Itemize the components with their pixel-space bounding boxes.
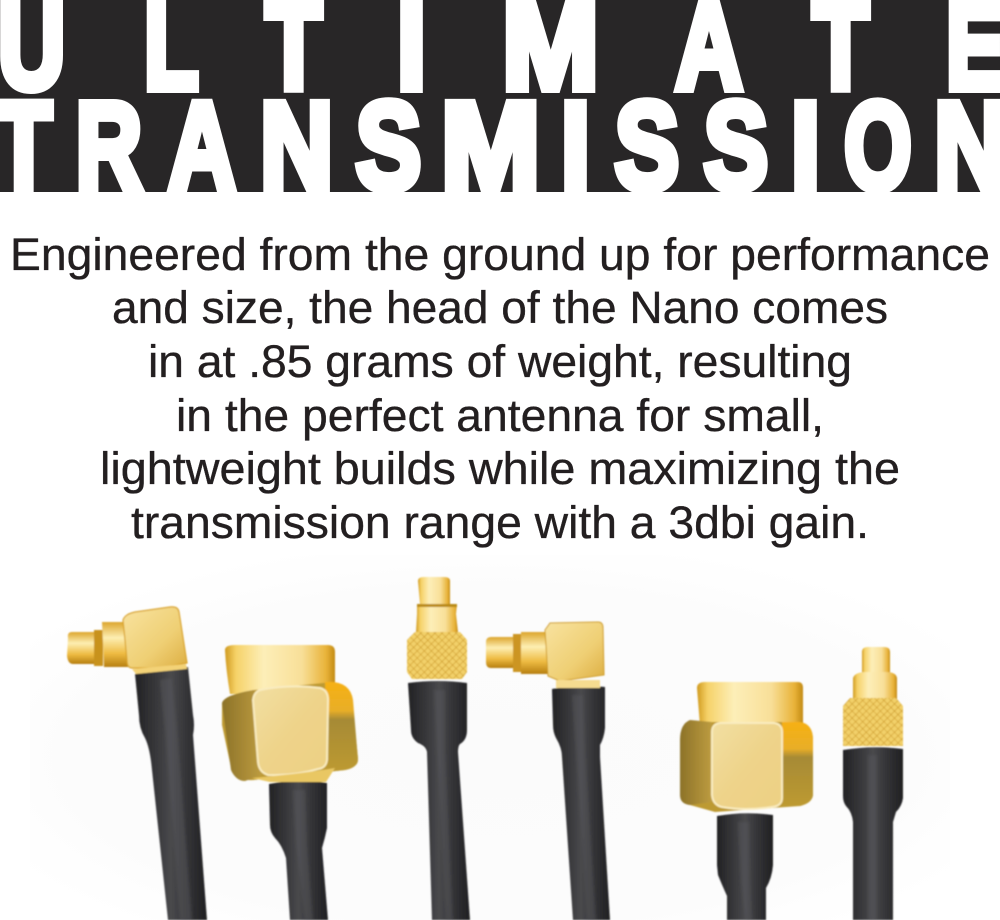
title line: TRANSMISSION: S (356, 78, 421, 216)
title line: TRANSMISSION: M (441, 78, 540, 216)
connector 2: SMA (222, 645, 358, 920)
title line: TRANSMISSION: S (704, 78, 768, 216)
title banner (0, 0, 1000, 192)
title line: TRANSMISSION: O (844, 78, 912, 216)
connector 1: right-angle MMCX (67, 607, 207, 920)
connector 3: straight knurled MMCX (407, 577, 470, 920)
description paragraph: in at .85 grams of weight, resulting (148, 336, 852, 387)
description paragraph (10, 229, 990, 548)
description paragraph: Engineered from the ground up for performance (10, 229, 990, 280)
title line: TRANSMISSION: A (168, 78, 236, 216)
title line: TRANSMISSION: N (260, 78, 333, 216)
title line: TRANSMISSION: S (615, 78, 679, 216)
title line: TRANSMISSION: I (791, 78, 820, 216)
connector 5: SMA (680, 682, 813, 920)
description paragraph: in the perfect antenna for small, (176, 390, 824, 441)
title line: TRANSMISSION: I (561, 78, 590, 216)
product photo: six antenna connectors (30, 555, 950, 920)
connector 6: straight knurled MMCX (843, 647, 903, 920)
description paragraph: and size, the head of the Nano comes (112, 282, 888, 333)
title line: TRANSMISSION: R (76, 78, 142, 216)
description paragraph: lightweight builds while maximizing the (100, 443, 900, 494)
connector 4: right-angle MMCX (486, 622, 610, 920)
description paragraph: transmission range with a 3dbi gain. (131, 497, 869, 548)
